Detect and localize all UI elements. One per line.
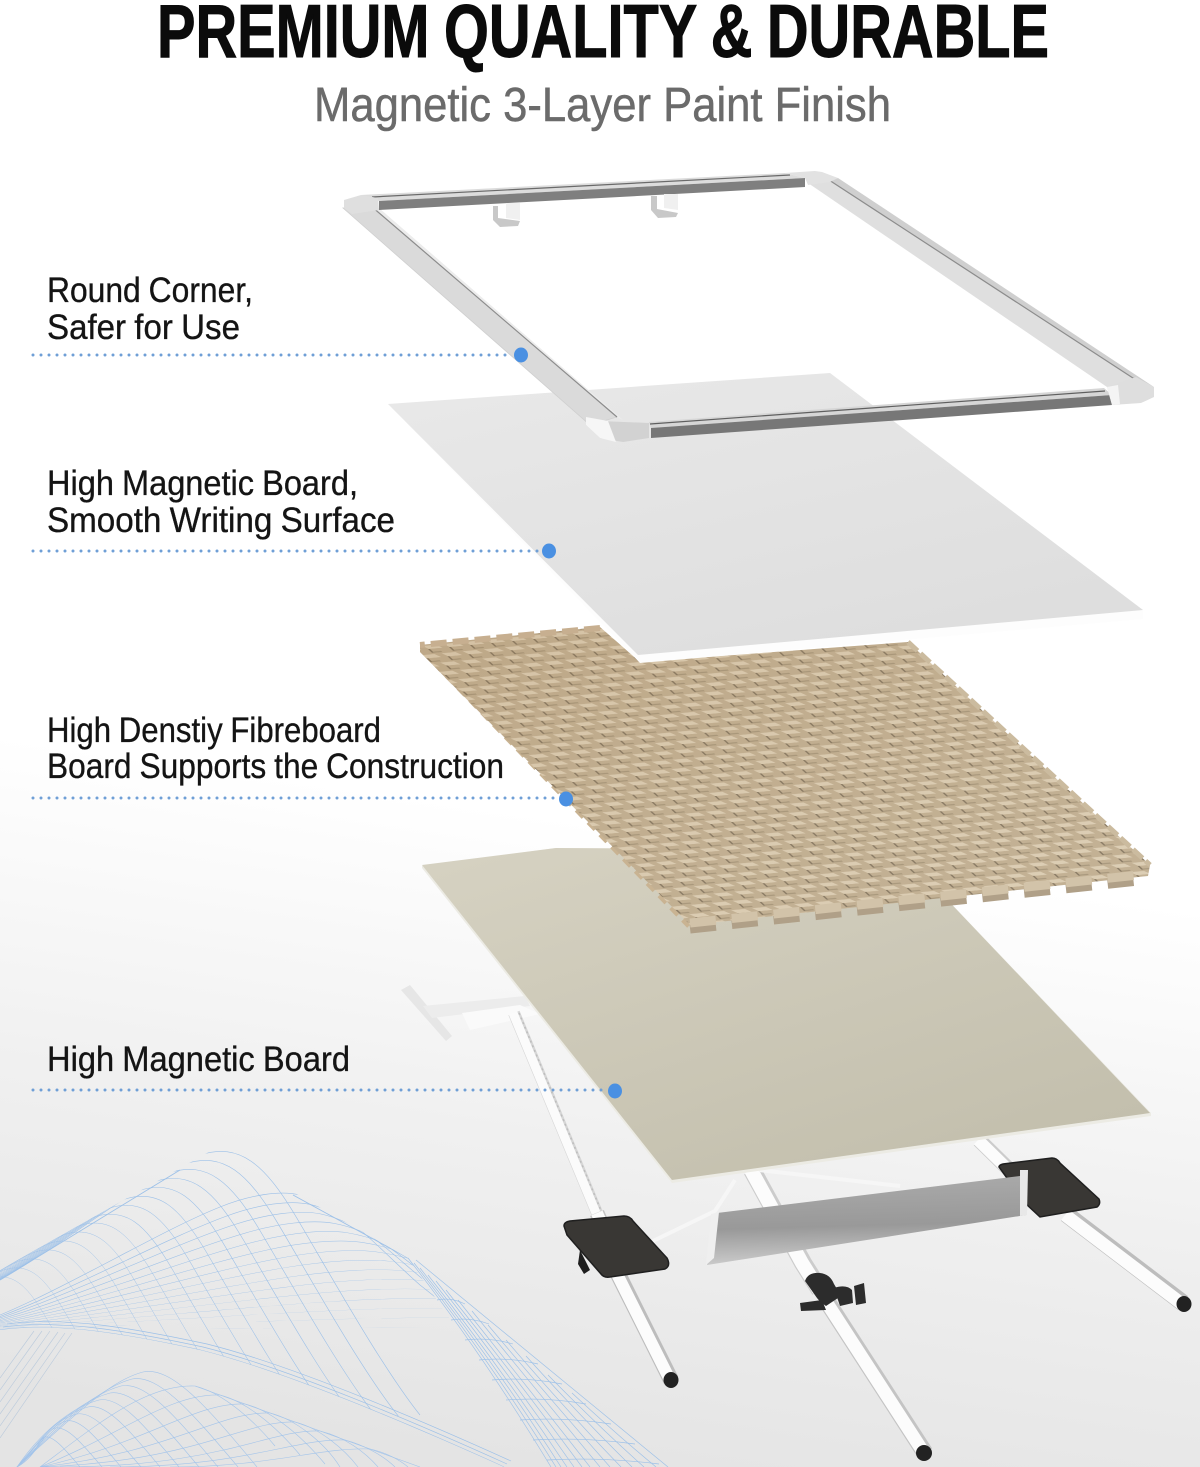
callout: round corner: Safer for Use	[47, 308, 240, 347]
panel: fibreboard honeycomb	[420, 627, 1150, 928]
clamp and knob	[800, 1273, 866, 1311]
right black pad	[999, 1158, 1192, 1312]
callout: high magnetic board	[33, 1040, 622, 1098]
cross braces	[653, 1170, 900, 1241]
left rail	[343, 206, 623, 425]
arches and sheet curves	[0, 1151, 511, 1467]
right wedge fan lines	[408, 1258, 668, 1467]
callout: round corner: Round Corner,	[47, 271, 253, 310]
right leg upper tube	[978, 1140, 1030, 1190]
panel: magnetic back board	[422, 848, 1151, 1183]
callout: high magnetic board: High Magnetic Board	[47, 1040, 350, 1079]
round corners	[344, 171, 1154, 442]
wave mesh decoration: small	[17, 1371, 420, 1467]
subtitle: Magnetic 3-Layer Paint Finish	[314, 79, 891, 132]
panel: white writing surface board	[388, 373, 1143, 663]
wave mesh decoration: large	[0, 1151, 668, 1467]
stand assembly	[401, 985, 1192, 1461]
tray	[706, 1170, 1028, 1265]
callout: high magnetic board, smooth writing surface	[33, 464, 556, 558]
callout: high density fibreboard: High Denstiy Fibreboard	[47, 711, 381, 750]
callout: high density fibreboard	[33, 711, 573, 806]
callout: high magnetic board, smooth writing surface: High Magnetic Board,	[47, 464, 358, 503]
panel: aluminium frame	[343, 171, 1154, 442]
middle leg lower tube and tip	[825, 1300, 932, 1461]
left black pad	[564, 1216, 678, 1388]
wave mesh decoration: hanging lines	[0, 1331, 72, 1438]
left leg	[513, 1013, 618, 1262]
callout: high magnetic board, smooth writing surface: Smooth Writing Surface	[47, 501, 395, 540]
top rail	[361, 173, 805, 210]
right rail	[808, 178, 1154, 387]
bottom rail	[649, 388, 1112, 438]
middle leg upper tube	[751, 1170, 820, 1290]
T-shaped top bracket	[401, 985, 540, 1041]
hanging hooks	[493, 194, 678, 227]
callout: round corner	[33, 271, 528, 362]
callout: high density fibreboard: Board Supports the Construction	[47, 747, 504, 786]
